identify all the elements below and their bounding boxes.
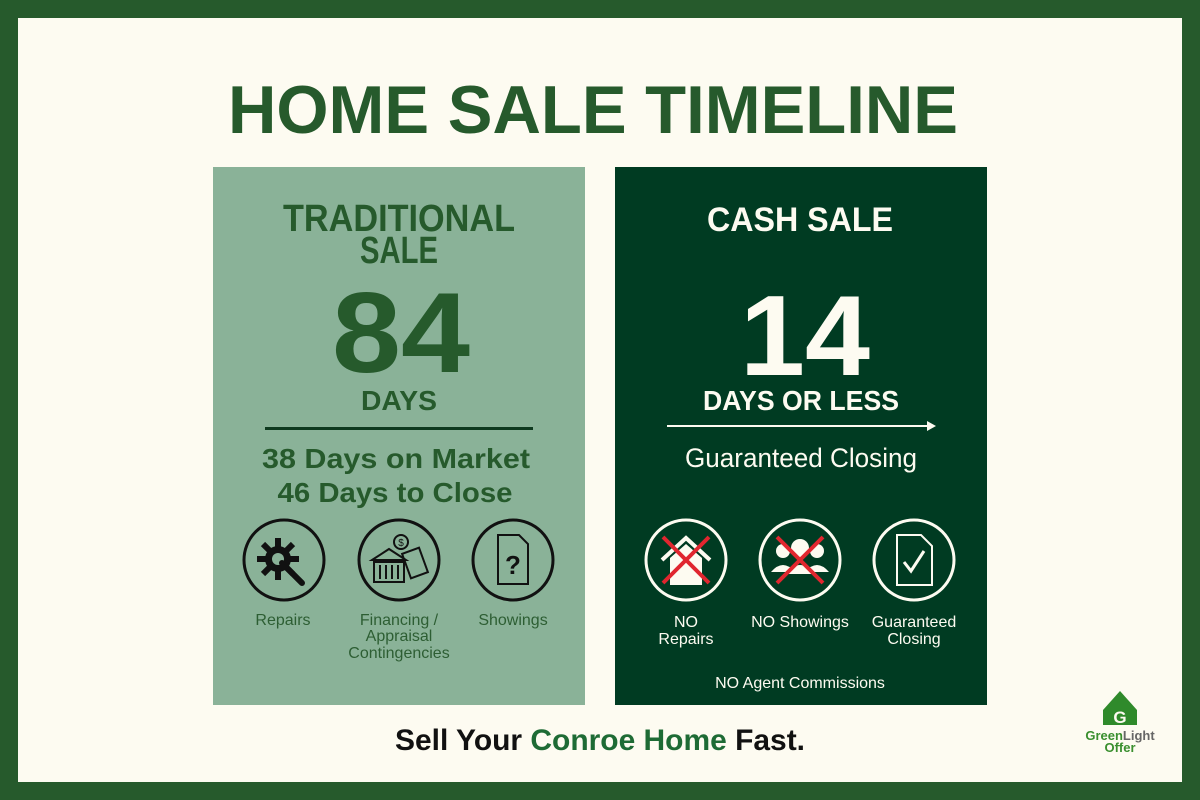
- panel: cash sale: [615, 167, 987, 705]
- icon: no showings: [760, 520, 840, 600]
- icon labels: Repairs: [658, 631, 714, 648]
- no agent commissions: NO Agent Commissions: [715, 675, 885, 692]
- icon labels: Repairs: [255, 612, 311, 629]
- icon labels: Contingencies: [348, 645, 450, 662]
- panel: traditional sale: [213, 167, 585, 705]
- breakdown text: [262, 443, 530, 508]
- icon labels: [255, 612, 548, 662]
- heading: traditional sale: SALE: [360, 230, 438, 272]
- icon: no repairs: [646, 520, 726, 600]
- arrow: [667, 421, 936, 431]
- icon labels: Showings: [478, 612, 548, 629]
- heading: traditional sale: TRADITIONAL: [283, 198, 515, 240]
- days label: DAYS: [361, 385, 437, 416]
- icon: financing bank money: $: [398, 538, 404, 549]
- footer tagline: Sell Your Conroe Home Fast.: [395, 724, 805, 757]
- icon labels: [658, 614, 956, 648]
- logo: [1085, 691, 1155, 755]
- icon: showings question doc: ?: [505, 550, 521, 580]
- title: HOME SALE TIMELINE: [228, 72, 958, 148]
- icon labels: Guaranteed: [872, 614, 956, 631]
- icon labels: Financing /: [360, 612, 439, 629]
- icon: financing bank money: [359, 520, 439, 600]
- icon: repairs gear wrench: [244, 520, 324, 600]
- logo: Offer: [1104, 740, 1136, 755]
- icon labels: NO: [674, 614, 698, 631]
- number 84: 84: [332, 270, 470, 397]
- logo: GreenLight: [1085, 728, 1155, 743]
- heading: traditional sale: [283, 198, 515, 272]
- guaranteed closing text: Guaranteed Closing: [685, 443, 917, 473]
- breakdown text: 38 Days on Market: [262, 443, 530, 474]
- logo: G: [1113, 708, 1127, 727]
- icon labels: Appraisal: [366, 628, 432, 645]
- number 14: 14: [740, 273, 870, 400]
- icon labels: NO Showings: [751, 614, 849, 631]
- icon labels: Closing: [887, 631, 941, 648]
- icon: guaranteed closing doc: [874, 520, 954, 600]
- days or less: DAYS OR LESS: [703, 385, 899, 416]
- heading: cash sale: CASH SALE: [707, 201, 893, 239]
- breakdown text: 46 Days to Close: [278, 477, 512, 508]
- icon: showings question doc: [473, 520, 553, 600]
